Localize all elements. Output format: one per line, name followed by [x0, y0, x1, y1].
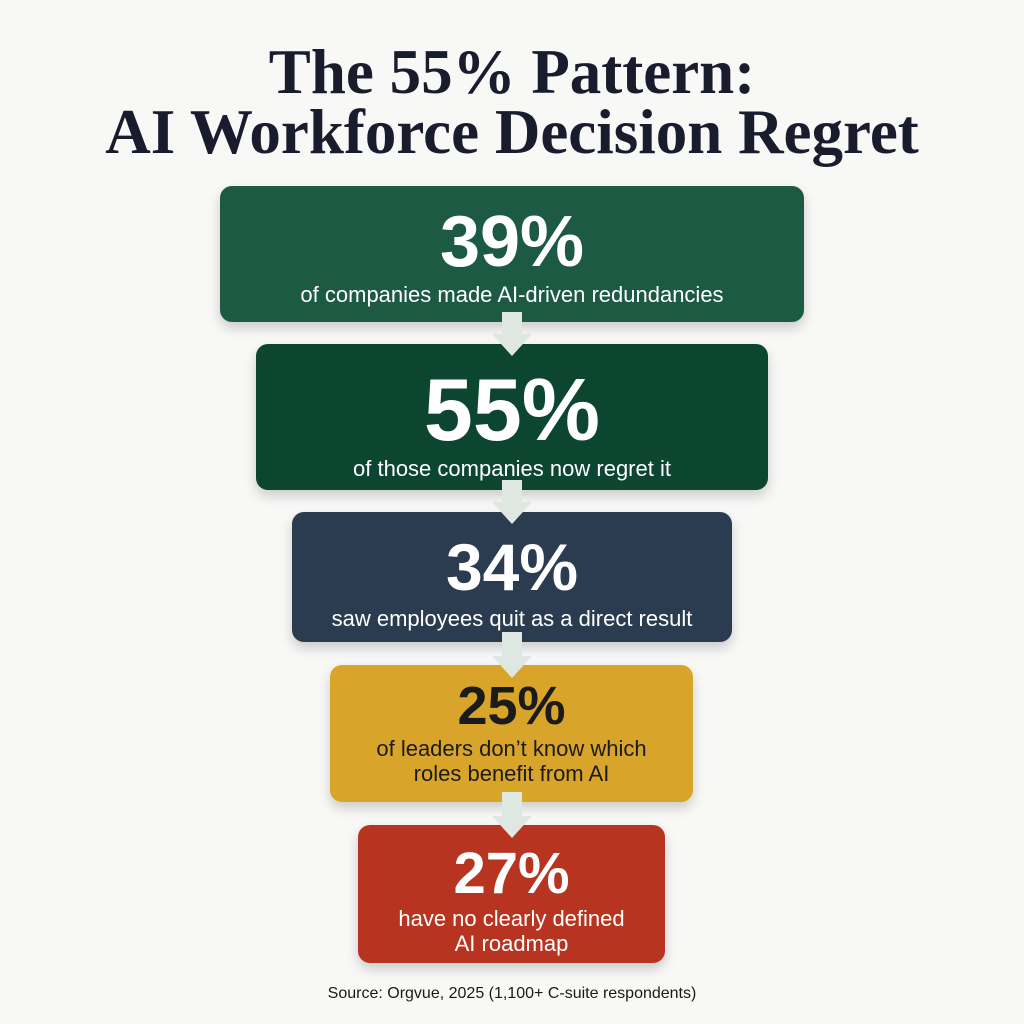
arrow 1 — [492, 312, 532, 356]
panel: 34% — [292, 512, 732, 642]
panel: 55%: of those companies now regret it — [353, 456, 671, 481]
source: Source: Orgvue, 2025 (1,100+ C-suite respondents) — [328, 985, 696, 1002]
panel: 27%: have no clearly defined — [398, 906, 625, 931]
title: AI Workforce Decision Regret — [105, 97, 919, 167]
panel: 55%: 55% — [424, 360, 600, 459]
panel: 34%: saw employees quit as a direct result — [332, 606, 692, 631]
panel: 25%: roles benefit from AI — [414, 761, 609, 786]
arrow 4 — [492, 792, 532, 838]
panel: 25% — [330, 665, 693, 802]
arrow 3 — [492, 632, 532, 678]
title: The 55% Pattern: — [269, 37, 755, 107]
panel: 39% — [220, 186, 804, 322]
panel: 39%: 39% — [440, 202, 584, 282]
panel: 25%: 25% — [457, 676, 566, 736]
arrow 2 — [492, 480, 532, 524]
panel: 27%: AI roadmap — [455, 931, 568, 956]
panel: 34%: 34% — [446, 530, 578, 604]
panel: 27% — [358, 825, 665, 963]
panel: 55% — [256, 344, 768, 490]
title — [105, 37, 919, 167]
panel: 27%: 27% — [453, 841, 570, 906]
panel: 25%: of leaders don’t know which — [376, 736, 647, 761]
panel: 39%: of companies made AI-driven redundancies — [300, 282, 724, 307]
